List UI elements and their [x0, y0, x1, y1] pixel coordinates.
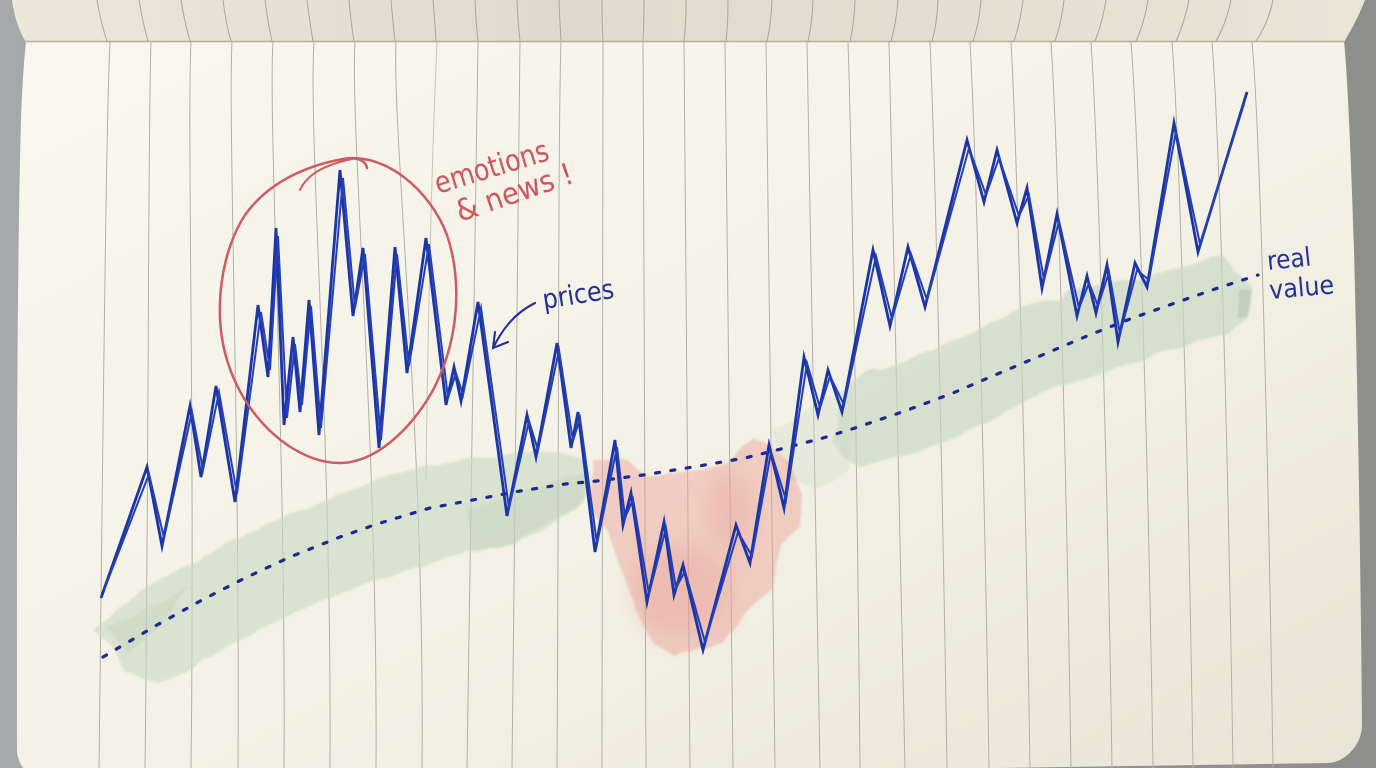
annotation: prices label: prices: [540, 274, 616, 316]
green watercolour band: right: [770, 255, 1253, 490]
red circle around volatile zone: [220, 158, 456, 463]
arrow: prices label to line: [493, 303, 535, 348]
annotation: emotions & news: [430, 134, 578, 230]
annotation: emotions & news: emotions: [430, 134, 553, 202]
annotation: emotions & news: & news !: [451, 157, 578, 230]
prices line chart: [101, 92, 1247, 650]
notebook top flap page: [12, 0, 1365, 42]
red watercolour wash under the dip: [590, 438, 802, 655]
ruled lines on flap: [97, 0, 1273, 41]
green watercolour band: left: [93, 452, 590, 685]
annotation: real value label: value: [1268, 270, 1335, 306]
annotation: real value label: [1266, 243, 1335, 306]
annotation: real value label: real: [1266, 243, 1312, 277]
real value dotted line: [103, 275, 1258, 657]
